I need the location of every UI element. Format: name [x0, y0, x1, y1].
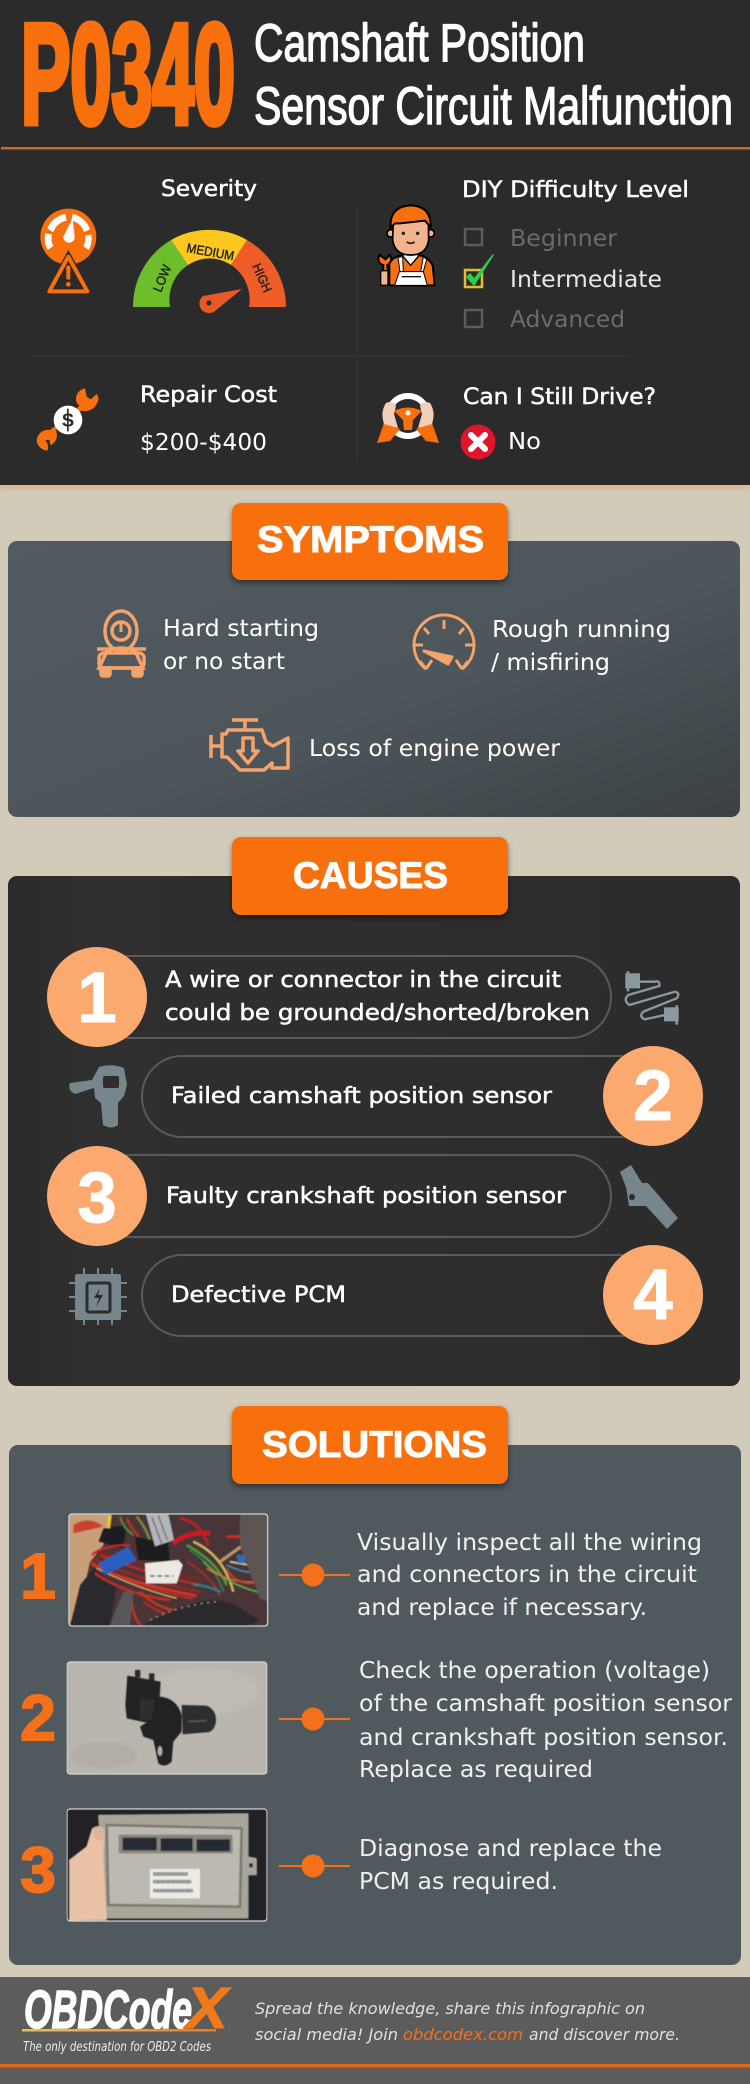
repair cost heading: Repair Cost [140, 383, 277, 408]
badge: solutions [232, 1406, 508, 1484]
text: rough running: Rough running [492, 617, 671, 643]
gauge needle [199, 289, 242, 313]
drive answer: No [508, 429, 541, 455]
text: hard starting [163, 616, 319, 675]
panel: symptoms [8, 503, 740, 817]
severity gauge: HIGH [249, 261, 275, 295]
icon: engine [211, 720, 288, 770]
footer message: obdcodex.com [403, 2025, 523, 2044]
cause 1: A wire or connector in the circuit [165, 968, 561, 993]
connector 3 [279, 1854, 350, 1878]
cause 4: Defective PCM [171, 1283, 346, 1308]
cause 1: 1 [77, 959, 117, 1038]
logo: OBDCode [24, 1980, 192, 2040]
solution 3 text: Diagnose and replace the [359, 1836, 662, 1862]
cause 2 [142, 1046, 703, 1146]
solution 1 text: and connectors in the circuit [357, 1562, 697, 1588]
repair cost value: $200-$400 [140, 430, 267, 456]
solution 2 text: Check the operation (voltage) [359, 1658, 710, 1684]
option: beginner: Beginner [510, 226, 618, 252]
icon: warning gauge [40, 209, 96, 295]
text: hard starting: or no start [163, 649, 285, 675]
solution 3 text: PCM as required. [359, 1869, 558, 1895]
badge: symptoms [232, 503, 508, 580]
panel: solutions [9, 1406, 741, 1965]
solution 2 text: and crankshaft position sensor. [359, 1725, 728, 1751]
cause 1 [47, 947, 611, 1047]
severity gauge [133, 230, 286, 313]
photo: sensor [67, 1661, 267, 1775]
option: advanced: Advanced [510, 307, 625, 333]
photo: pcm [67, 1808, 267, 1922]
panel: causes [8, 837, 740, 1386]
solution 1 text [357, 1530, 702, 1621]
header panel [0, 0, 750, 489]
cause 2: Failed camshaft position sensor [171, 1084, 553, 1109]
solution 2 text: of the camshaft position sensor [359, 1691, 733, 1717]
solution 3 number: 3 [20, 1834, 56, 1906]
badge: symptoms: SYMPTOMS [257, 519, 484, 560]
solution 1 number: 1 [20, 1540, 56, 1612]
solution 2 text: Replace as required [359, 1757, 593, 1783]
solution 2 number: 2 [20, 1682, 56, 1754]
cause 4: 4 [633, 1256, 673, 1335]
option: beginner [465, 226, 618, 252]
solution 1 text: and replace if necessary. [357, 1595, 647, 1621]
footer message: social media! Join [255, 2025, 398, 2044]
footer message: Spread the knowledge, share this infographic on [255, 1999, 645, 2018]
solution 3 text [359, 1836, 662, 1895]
icon: chip [69, 1268, 127, 1325]
cause 3 [47, 1146, 611, 1246]
severity gauge: LOW [150, 262, 175, 294]
heading line one: Camshaft Position [254, 14, 585, 73]
drive heading: Can I Still Drive? [463, 385, 656, 410]
icon: camshaft sensor [69, 1065, 127, 1128]
logo [22, 1976, 232, 2055]
logo: X [183, 1976, 232, 2041]
solution 1 text: Visually inspect all the wiring [357, 1530, 702, 1556]
badge: causes [232, 837, 508, 915]
badge: solutions: SOLUTIONS [262, 1424, 487, 1465]
footer message: and discover more. [529, 2025, 680, 2044]
badge: causes: CAUSES [293, 855, 448, 896]
option: intermediate: Intermediate [510, 267, 662, 293]
footer message [255, 1999, 680, 2044]
cause 2: 2 [633, 1057, 673, 1136]
cause 1: could be grounded/shorted/broken [165, 1001, 590, 1026]
icon: crankshaft sensor [620, 1165, 678, 1229]
icon: wrench with dollar [37, 388, 98, 451]
cause 3: 3 [77, 1159, 117, 1238]
icon: steering wheel [377, 396, 439, 443]
text: rough running: / misfiring [491, 650, 610, 676]
cause 3: Faulty crankshaft position sensor [166, 1184, 567, 1209]
severity gauge: MEDIUM [185, 240, 235, 263]
connector 1 [279, 1564, 350, 1586]
icon: wrench with dollar: S [62, 410, 74, 431]
solution 2 text [359, 1658, 733, 1783]
icon: red x [460, 424, 496, 460]
logo tagline: The only destination for OBD2 Codes [23, 2040, 211, 2055]
text: rough running [491, 617, 671, 676]
difficulty heading: DIY Difficulty Level [462, 178, 689, 203]
cause 4 [142, 1245, 703, 1345]
text: hard starting: Hard starting [163, 616, 319, 642]
icon: cable [625, 971, 679, 1025]
option: intermediate [465, 255, 662, 293]
icon: mechanic [378, 205, 435, 285]
severity heading: Severity [161, 177, 257, 202]
text: loss of engine power: Loss of engine power [309, 736, 561, 762]
icon: speedometer [414, 615, 474, 669]
photo: wiring harness [68, 1513, 268, 1627]
footer [0, 1976, 750, 2084]
connector 2 [279, 1708, 350, 1730]
icon: car power [97, 611, 146, 676]
